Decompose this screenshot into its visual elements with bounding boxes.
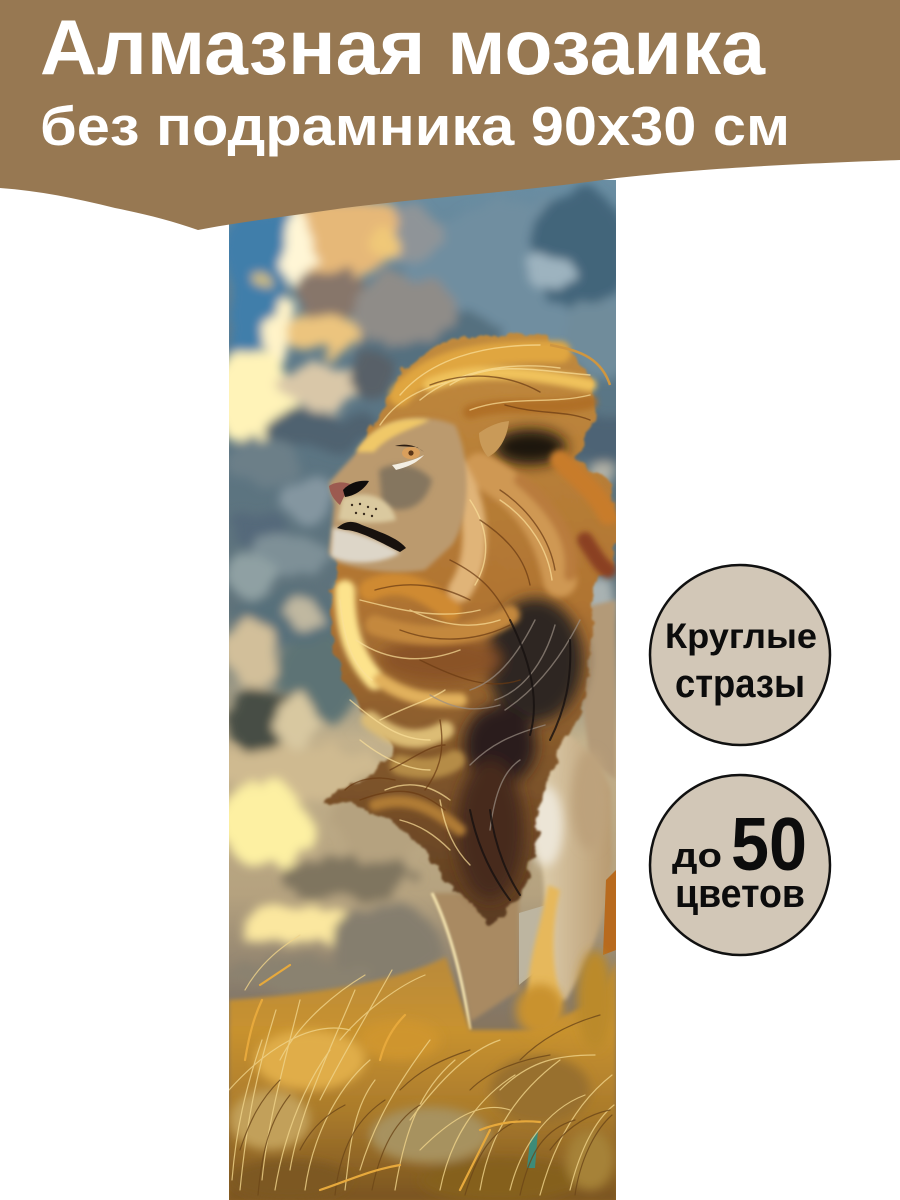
sky clouds bbox=[229, 182, 616, 976]
wind-blown lock of hair bbox=[550, 345, 610, 385]
badge: round rhinestones: стразы bbox=[675, 662, 805, 706]
header banner bbox=[0, 0, 900, 230]
badge: up to 50 colours: цветов bbox=[675, 872, 805, 916]
grass blades bbox=[229, 935, 614, 1195]
badge: round rhinestones: Круглые bbox=[665, 617, 817, 656]
badge: up to 50 colours: до bbox=[672, 837, 722, 875]
whisker spots bbox=[351, 503, 377, 517]
title: Алмазная мозаика bbox=[40, 3, 766, 91]
lion body and legs bbox=[432, 600, 616, 1030]
subtitle: без подрамника 90х30 см bbox=[40, 95, 790, 157]
mane hair strands bbox=[340, 345, 590, 900]
dry grass bbox=[229, 935, 616, 1200]
painting: lion in the savanna bbox=[210, 180, 640, 1200]
badge: up to 50 colours bbox=[650, 775, 830, 955]
dark mane shadow bbox=[380, 429, 583, 900]
badge: round rhinestones bbox=[650, 565, 830, 745]
broad mane locks bbox=[345, 352, 608, 830]
badge: up to 50 colours: 50 bbox=[731, 802, 807, 886]
lion mane bbox=[325, 334, 616, 925]
lion face bbox=[329, 418, 509, 572]
